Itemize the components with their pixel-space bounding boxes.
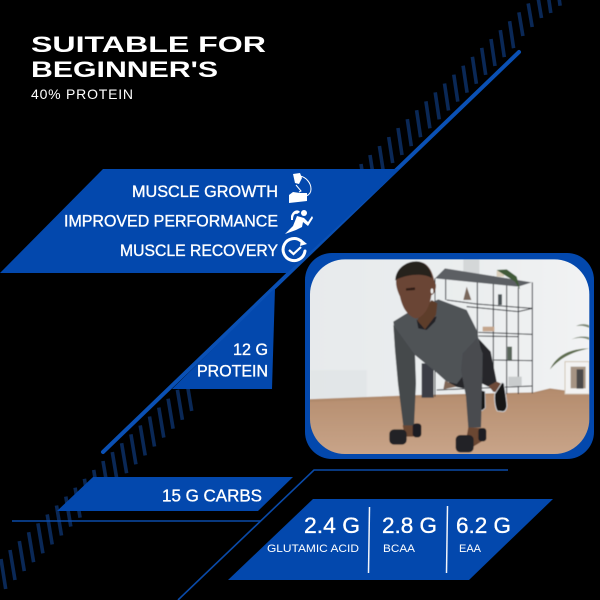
photo frame <box>305 253 594 459</box>
icon: flexed bicep <box>289 173 311 203</box>
neck and head <box>417 300 437 329</box>
stat: bcaa: 2.8 G <box>382 513 437 538</box>
hatch band: upper diagonal stripes <box>361 0 560 190</box>
shelving <box>435 269 532 397</box>
protein amount: 12 G <box>233 340 268 359</box>
shelf items <box>463 287 471 300</box>
icon: recovery check circle <box>283 239 307 261</box>
floor <box>307 389 593 457</box>
near shoe <box>494 382 507 412</box>
panel: protein <box>172 288 275 389</box>
stat: glutamic acid: 2.4 G <box>304 513 360 538</box>
near arm <box>462 350 483 428</box>
thin angled rule <box>178 470 508 600</box>
picture <box>565 362 589 394</box>
long diagonal accent line <box>103 52 519 452</box>
stat: glutamic acid: GLUTAMIC ACID <box>267 543 359 555</box>
benefit: muscle recovery: MUSCLE RECOVERY <box>120 242 278 260</box>
title <box>31 32 266 82</box>
far shoe <box>480 390 485 411</box>
protein label: PROTEIN <box>197 362 268 380</box>
stat: eaa: 6.2 G <box>456 513 511 538</box>
wall <box>307 257 593 400</box>
dumbbells <box>413 423 421 437</box>
stat: eaa: EAA <box>459 543 482 555</box>
subtitle: 40% PROTEIN <box>31 86 133 102</box>
thin horizontal rule under carbs <box>12 520 261 522</box>
title: BEGINNER'S <box>31 57 218 82</box>
benefit: improved performance: IMPROVED PERFORMANCE <box>64 212 278 230</box>
carbs text: 15 G CARBS <box>162 486 262 506</box>
torso <box>393 299 482 384</box>
stat: bcaa: BCAA <box>383 543 416 555</box>
stat: glutamic acid <box>267 513 360 555</box>
stat: bcaa <box>382 513 437 555</box>
stat: eaa <box>456 513 511 555</box>
hatch band: lower diagonal stripes <box>1 381 192 589</box>
panel: amino acids <box>228 499 553 580</box>
hands <box>403 425 415 437</box>
photo: man doing push-ups with dumbbells <box>307 257 593 457</box>
benefit: muscle growth: MUSCLE GROWTH <box>132 183 278 201</box>
exercise roller <box>422 363 434 398</box>
shorts and legs <box>447 338 497 388</box>
far arm <box>393 325 416 426</box>
palm <box>550 348 589 369</box>
panel: benefits <box>0 169 400 273</box>
title: SUITABLE FOR <box>31 32 266 57</box>
icon: runner <box>285 210 313 234</box>
panel: carbs <box>57 477 293 511</box>
